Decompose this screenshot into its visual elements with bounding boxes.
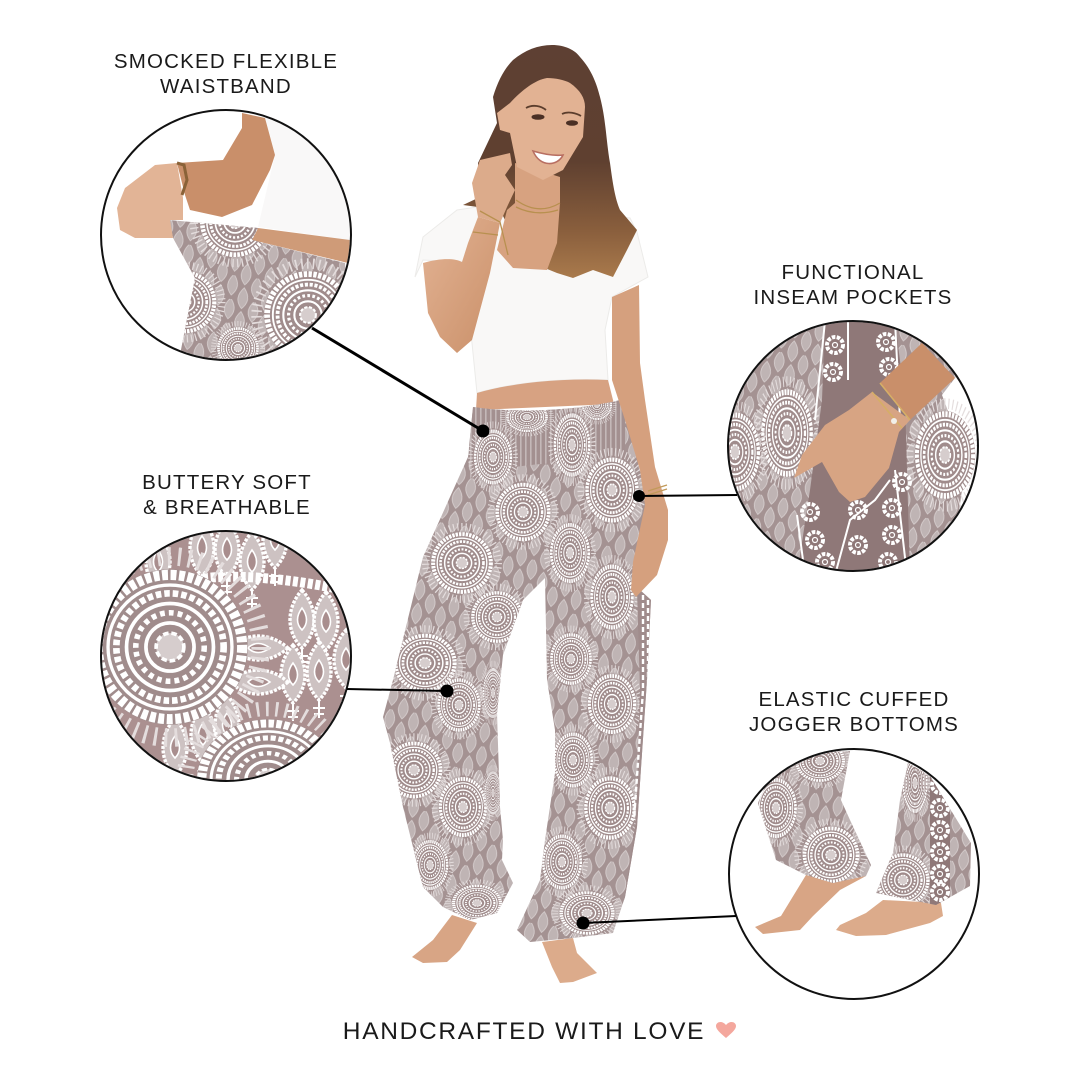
side panel stripe <box>624 590 652 900</box>
left foot <box>755 875 866 934</box>
hair <box>463 45 637 278</box>
callout: smocked flexible waistband <box>100 50 490 438</box>
bracelets <box>872 383 910 428</box>
lower mandala <box>178 702 327 780</box>
right foot <box>542 938 597 983</box>
model figure <box>380 45 668 983</box>
necklace and bracelets <box>473 200 560 255</box>
heading <box>753 261 953 309</box>
leader line and dot <box>576 916 736 930</box>
patterned harem pants <box>380 387 660 945</box>
heading: WAISTBAND <box>160 75 292 98</box>
white shirt <box>258 110 352 240</box>
left arm <box>423 217 500 353</box>
heading: INSEAM POCKETS <box>753 286 953 309</box>
right foot <box>836 900 943 936</box>
detail photo circle <box>729 322 977 570</box>
heading: ELASTIC CUFFED <box>758 688 950 711</box>
eyes and smile <box>526 106 581 164</box>
leader line and dot <box>633 490 737 502</box>
left cuff <box>758 751 871 883</box>
forearm <box>880 343 955 420</box>
leader line and dot <box>312 328 490 438</box>
scalloped arc above <box>160 577 345 590</box>
feather motifs <box>144 532 350 778</box>
midriff <box>252 228 350 263</box>
wrist bracelet <box>648 485 667 495</box>
heading: & BREATHABLE <box>143 496 311 519</box>
circle outline <box>728 321 978 571</box>
circle outline <box>729 749 979 999</box>
background gap <box>942 377 977 510</box>
smocked waistband <box>470 400 625 478</box>
heading <box>114 50 338 98</box>
infographic canvas <box>100 45 980 1039</box>
heading <box>142 471 312 519</box>
white top <box>415 205 648 393</box>
hand <box>117 163 183 238</box>
right cuff <box>876 763 971 905</box>
heading: FUNCTIONAL <box>782 261 924 284</box>
raised hand <box>472 153 515 223</box>
circle outline <box>101 531 351 781</box>
detail photo circle <box>117 113 350 359</box>
heading: SMOCKED FLEXIBLE <box>114 50 338 73</box>
leader line and dot <box>347 684 454 698</box>
callout: buttery soft and breathable <box>100 475 454 782</box>
callout: functional inseam pockets <box>633 261 990 575</box>
detail photo circle <box>755 751 971 936</box>
heading: BUTTERY SOFT <box>142 471 312 494</box>
icon: heart <box>716 1022 736 1038</box>
face <box>497 78 585 180</box>
neck and chest <box>497 163 560 270</box>
midriff <box>476 380 614 410</box>
waistband fabric <box>170 220 346 359</box>
left foot <box>412 915 477 963</box>
heading <box>749 688 959 736</box>
bracelet <box>177 163 187 195</box>
large mandala <box>79 556 261 738</box>
pocket panel <box>797 321 910 575</box>
tagline with heart: HANDCRAFTED WITH LOVE <box>343 1018 705 1045</box>
arm <box>177 113 275 217</box>
detail photo circle <box>102 532 350 780</box>
hand in pocket <box>794 392 910 502</box>
circle outline <box>101 110 351 360</box>
heading: JOGGER BOTTOMS <box>749 713 959 736</box>
right arm and hand <box>612 285 668 597</box>
mandalas <box>757 382 817 484</box>
callout: elastic cuffed jogger bottoms <box>576 688 980 999</box>
